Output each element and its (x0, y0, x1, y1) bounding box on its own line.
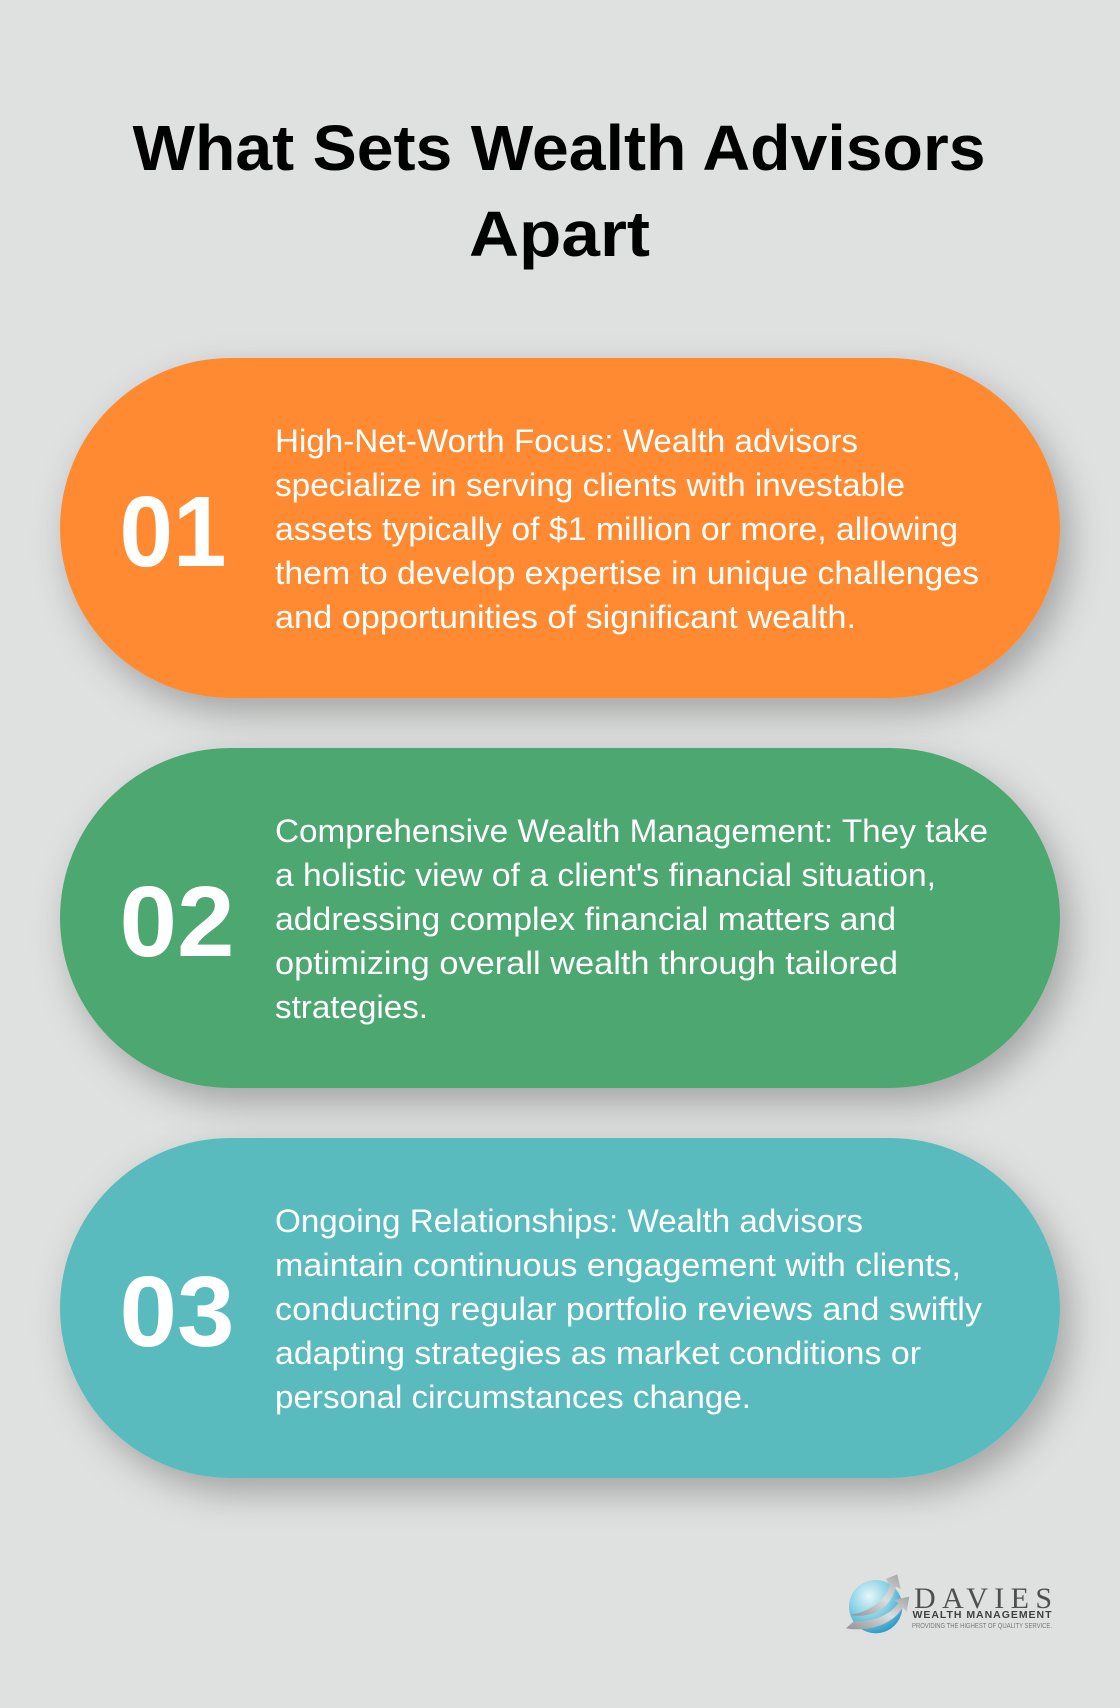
green pill card (60, 748, 1060, 1088)
text block: ongoing relationships: personal circumstances change. (275, 1379, 751, 1415)
logo wordmark: DAVIES (914, 1582, 1052, 1615)
text block: comprehensive wealth management: a holistic view of a client's financial situation, (275, 857, 936, 893)
text block: comprehensive wealth management: Comprehensive Wealth Management: They take (275, 813, 988, 849)
text block: high-net-worth focus: specialize in serving clients with investable (275, 467, 905, 503)
text block: ongoing relationships: adapting strategies as market conditions or (275, 1335, 921, 1371)
title: Apart (469, 198, 650, 270)
title (132, 112, 986, 270)
text block: high-net-worth focus: them to develop expertise in unique challenges (275, 555, 979, 591)
number 03: 03 (120, 1256, 234, 1368)
panel: comprehensive wealth management (60, 748, 1060, 1088)
title: What Sets Wealth Advisors (132, 112, 986, 184)
text block: comprehensive wealth management (275, 813, 988, 1025)
text block: high-net-worth focus (275, 423, 979, 635)
logo subtitle: WEALTH MANAGEMENT (912, 1609, 1052, 1621)
text block: ongoing relationships: maintain continuous engagement with clients, (275, 1247, 961, 1283)
number 02: 02 (120, 866, 234, 978)
text block: ongoing relationships: Ongoing Relationships: Wealth advisors (275, 1203, 863, 1239)
text block: comprehensive wealth management: strategies. (275, 989, 428, 1025)
text block: comprehensive wealth management: addressing complex financial matters and (275, 901, 896, 937)
number 01: 01 (120, 476, 226, 588)
panel: ongoing relationships (60, 1138, 1060, 1478)
text block: high-net-worth focus: assets typically of $1 million or more, allowing (275, 511, 958, 547)
teal pill card (60, 1138, 1060, 1478)
text block: high-net-worth focus: and opportunities of significant wealth. (275, 599, 856, 635)
logo tagline: PROVIDING THE HIGHEST OF QUALITY SERVICE. (912, 1623, 1052, 1630)
text block: ongoing relationships (275, 1203, 982, 1415)
panel: high-net-worth focus (60, 358, 1060, 698)
icon: globe with arrows (846, 1574, 909, 1633)
logo: Davies Wealth Management (846, 1574, 1052, 1633)
text block: high-net-worth focus: High-Net-Worth Focus: Wealth advisors (275, 423, 858, 459)
orange pill card (60, 358, 1060, 698)
text block: ongoing relationships: conducting regular portfolio reviews and swiftly (275, 1291, 982, 1327)
text block: comprehensive wealth management: optimizing overall wealth through tailored (275, 945, 898, 981)
